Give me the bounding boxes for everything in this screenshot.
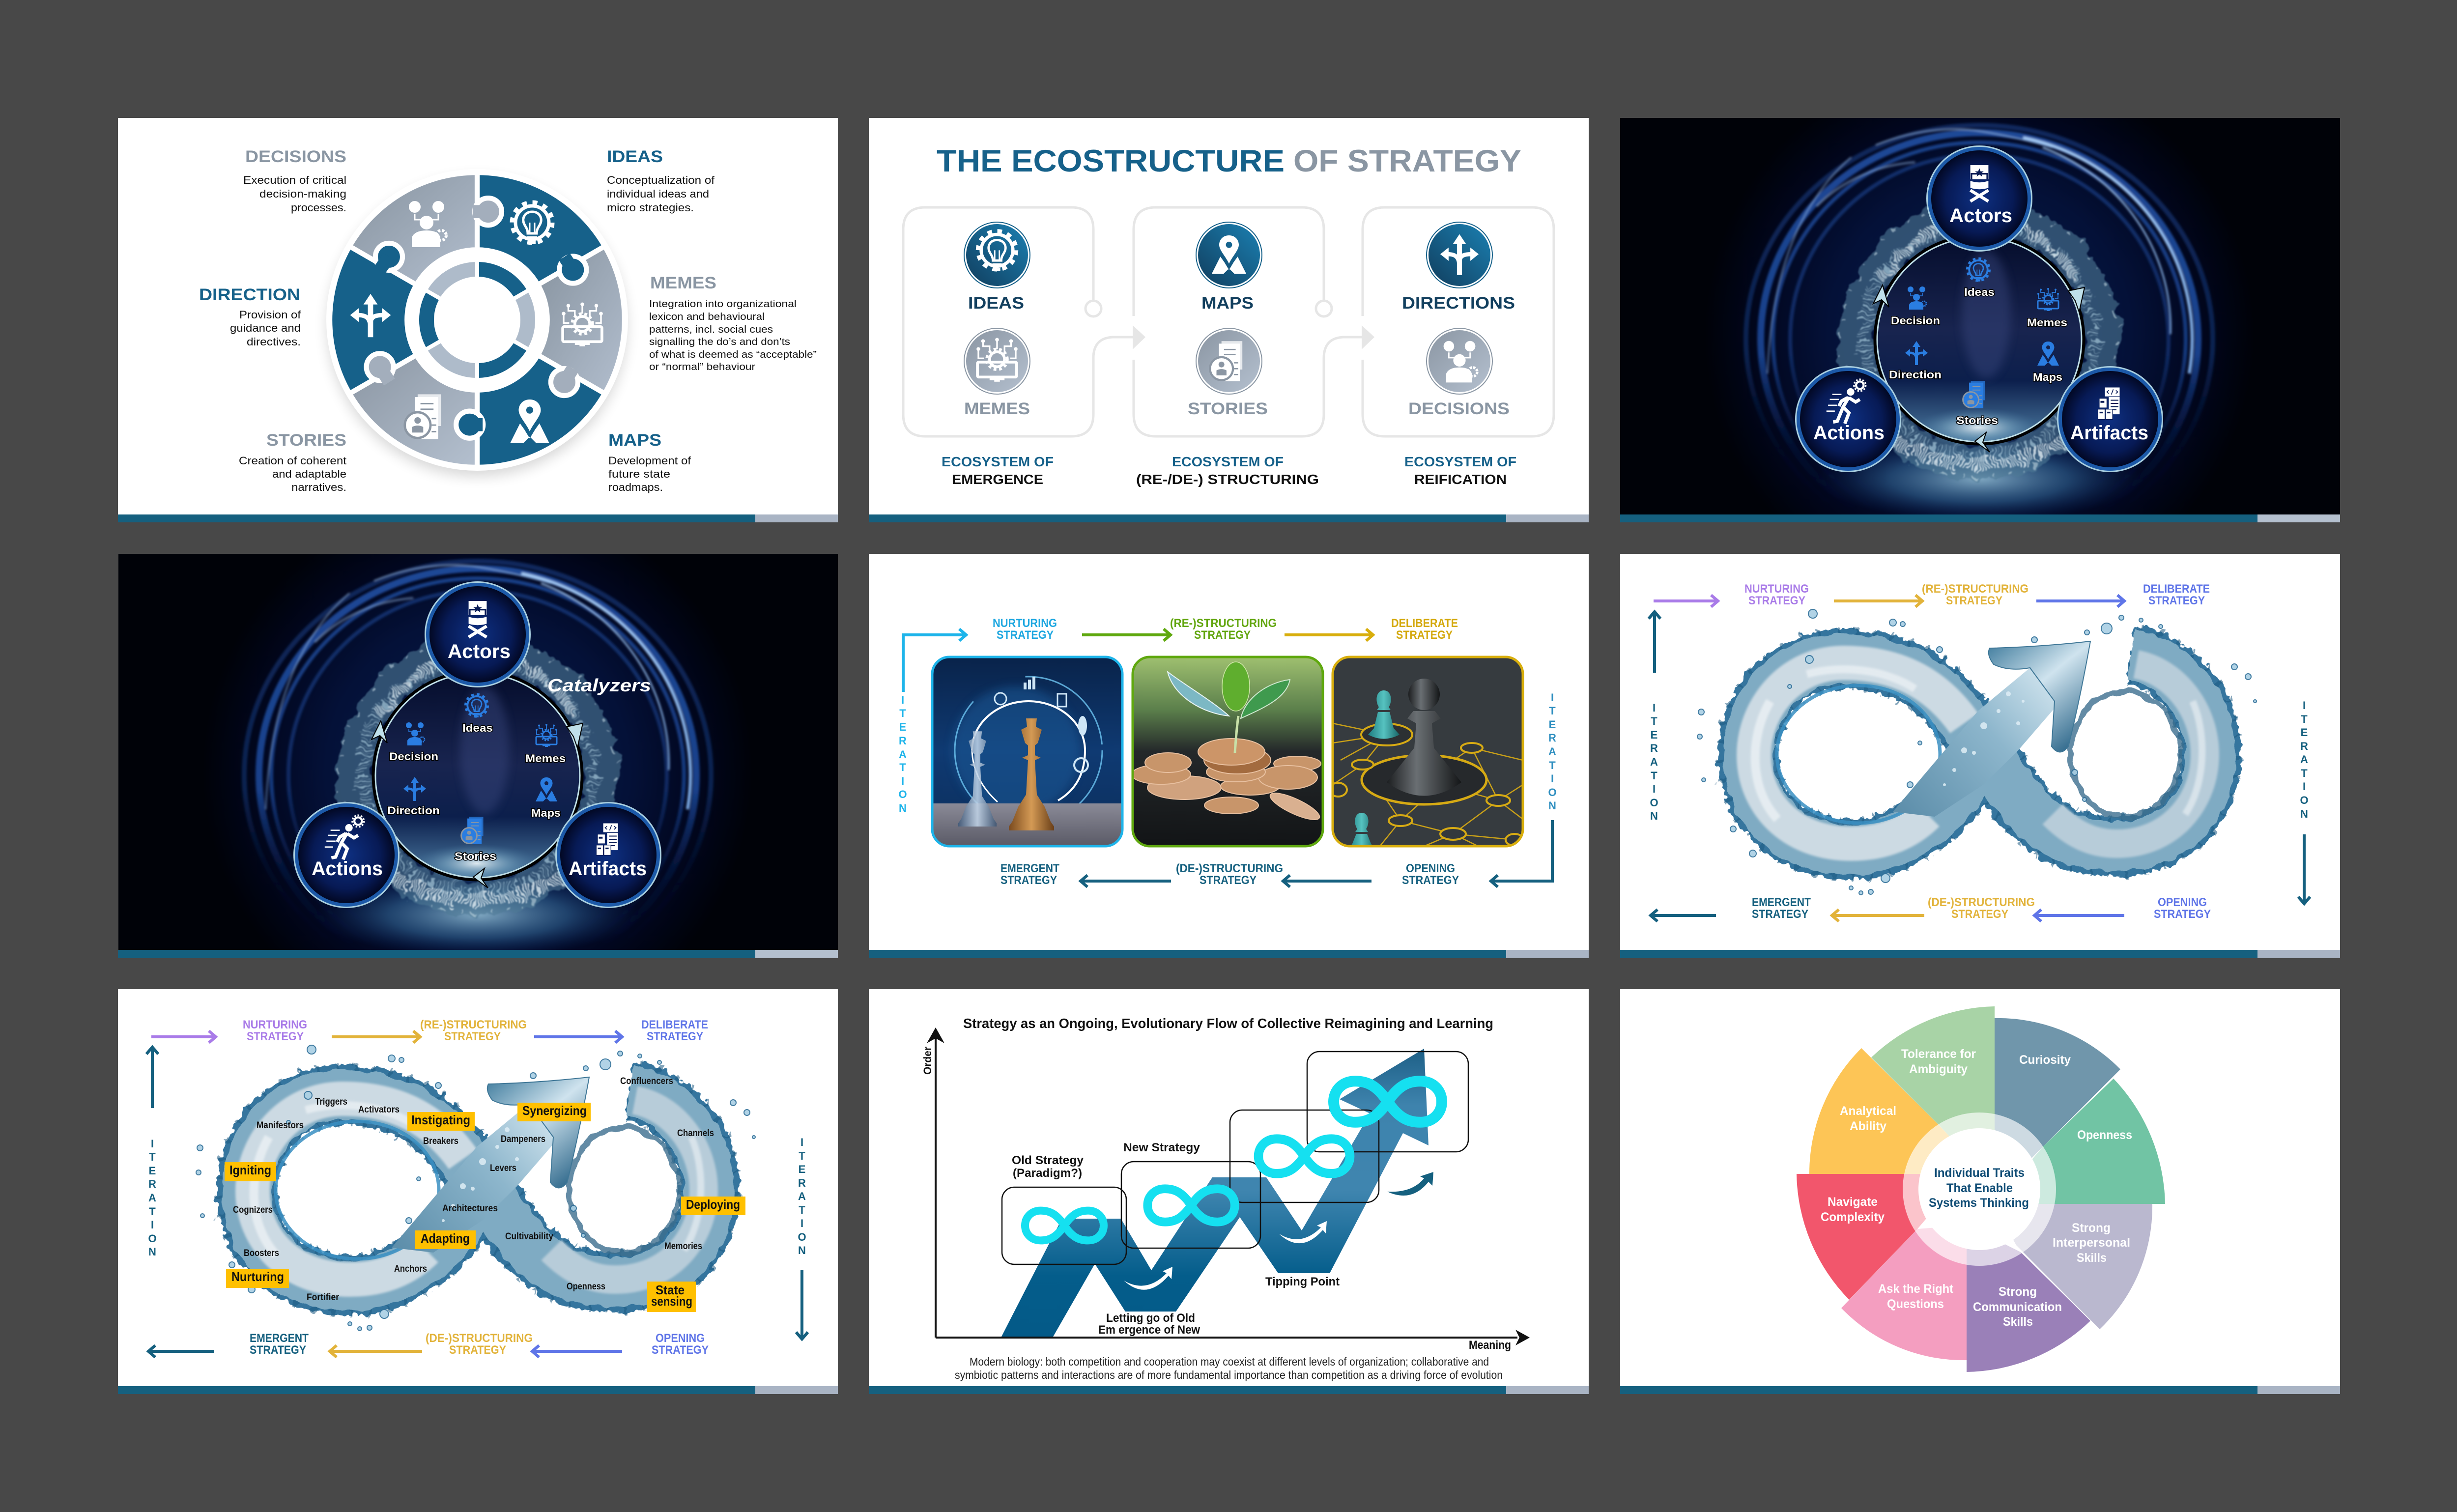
axes: Order	[921, 1047, 934, 1075]
inner items: Memes	[2027, 316, 2067, 329]
segment labels: Tolerance for	[1901, 1047, 1976, 1061]
yellow process labels: Igniting	[229, 1163, 271, 1177]
column: maps and stories: STORIES	[1188, 399, 1268, 418]
axes	[921, 1027, 1530, 1352]
black mechanism labels: Openness	[567, 1282, 605, 1292]
iteration right: N	[1548, 799, 1556, 812]
segment labels: Ambiguity	[1909, 1062, 1968, 1076]
footer bar	[118, 950, 838, 958]
text block: stories: and adaptable	[272, 468, 346, 480]
chart annotations: New Strategy	[1123, 1141, 1200, 1154]
iteration left with up arrow: O	[148, 1232, 157, 1245]
iteration right with down arrow: I	[800, 1217, 803, 1229]
image: plant growing from coins	[1132, 657, 1323, 846]
black mechanism labels: Fortifier	[307, 1292, 340, 1303]
yellow process labels: sensing	[651, 1294, 692, 1309]
black mechanism labels: Breakers	[423, 1136, 458, 1146]
iteration left: N	[899, 802, 907, 814]
node: actions	[293, 802, 400, 908]
column: directions and decisions: DECISIONS	[1408, 399, 1510, 418]
text block: maps: roadmaps.	[608, 481, 663, 493]
bottom strategy labels: (DE-)STRUCTURING	[426, 1332, 533, 1345]
bottom strategy labels: STRATEGY	[1951, 908, 2008, 921]
iteration right with down arrow: T	[2301, 767, 2308, 779]
column: ideas and memes: MEMES	[964, 399, 1030, 418]
text block: maps: future state	[608, 468, 670, 480]
text block: ideas: individual ideas and	[607, 188, 709, 200]
footer bar	[869, 1386, 1589, 1394]
black mechanism labels: Cultivability	[505, 1231, 553, 1242]
text block: decisions: DECISIONS	[245, 147, 346, 166]
iteration right: I	[1551, 691, 1554, 704]
node: artifacts: Artifacts	[569, 858, 647, 880]
text block: stories: STORIES	[266, 431, 346, 450]
footer bar	[1620, 950, 2340, 958]
iteration left with up arrow: A	[148, 1192, 156, 1204]
segment labels: Complexity	[1821, 1210, 1885, 1224]
iteration left with up arrow: N	[1650, 810, 1658, 822]
top arrows	[1654, 595, 2124, 607]
iteration left with up arrow: N	[148, 1246, 156, 1258]
image: chess king with digital icons	[932, 657, 1122, 846]
black mechanism labels: Levers	[490, 1163, 516, 1173]
footer bar	[869, 950, 1589, 958]
text block: decisions	[243, 147, 346, 214]
inner items: Direction	[387, 804, 440, 817]
text block: memes: signalling the do’s and don’ts	[649, 337, 790, 347]
text block: memes: patterns, incl. social cues	[649, 324, 773, 335]
axes: Meaning	[1469, 1339, 1511, 1352]
iteration left with up arrow: T	[1651, 770, 1657, 782]
iteration left with up arrow: R	[1650, 742, 1658, 754]
iteration right with down arrow: I	[2303, 780, 2306, 793]
column: ideas and memes	[964, 222, 1030, 418]
text block: decisions: decision-making	[259, 188, 346, 200]
footnote: Modern biology: both competition and cooperation may coexist at different levels of organization; collaborative and	[970, 1355, 1489, 1368]
panel: strategy cycle with three images	[869, 554, 1589, 958]
black mechanism labels: Activators	[358, 1105, 400, 1115]
top arrows	[903, 629, 1373, 692]
bottom strategy labels: OPENING	[1406, 862, 1455, 875]
node: actors: Actors	[1949, 205, 2012, 227]
footer bar	[1620, 1386, 2340, 1394]
footnote: symbiotic patterns and interactions are of more fundamental importance than competition as a driving force of evolution	[955, 1369, 1503, 1381]
iteration left with up arrow: T	[149, 1151, 156, 1163]
segment labels: Strong	[2072, 1221, 2111, 1235]
iteration right with down arrow: I	[800, 1136, 803, 1148]
ecosystem captions: REIFICATION	[1414, 472, 1507, 487]
iteration right with down arrow	[796, 1136, 808, 1339]
segment labels: Ability	[1850, 1119, 1886, 1133]
text block: maps: MAPS	[608, 431, 661, 450]
iteration right with down arrow: T	[799, 1204, 805, 1216]
inner items: Ideas	[462, 722, 493, 734]
text block: direction: guidance and	[230, 322, 301, 334]
bottom arrows	[1081, 820, 1552, 887]
iteration right with down arrow	[2298, 699, 2310, 904]
bottom strategy labels: EMERGENT	[250, 1332, 309, 1345]
top strategy labels	[993, 617, 1458, 642]
infinity symbols	[1025, 1081, 1442, 1240]
iteration left: I	[901, 775, 904, 787]
top strategy labels: STRATEGY	[2148, 594, 2205, 607]
bottom strategy labels	[1000, 862, 1459, 887]
iteration left: T	[899, 707, 906, 719]
iteration left: R	[899, 735, 907, 747]
black mechanism labels: Dampeners	[501, 1134, 545, 1144]
inner items	[387, 694, 566, 862]
yellow process labels: Synergizing	[522, 1103, 587, 1118]
text block: memes: Integration into organizational	[649, 299, 797, 310]
chart annotations: Em ergence of New	[1098, 1323, 1200, 1337]
yellow process labels	[225, 1103, 745, 1312]
text block: memes: or “normal” behaviour	[649, 362, 755, 372]
chart annotations: (Paradigm?)	[1013, 1167, 1082, 1180]
iteration right with down arrow: E	[799, 1163, 805, 1175]
node: actions	[1795, 366, 1901, 472]
text block: direction	[199, 285, 301, 348]
panel: puzzle wheel of decisions, ideas, memes, maps, stories, direction	[118, 118, 838, 522]
iteration right: A	[1548, 745, 1556, 758]
iteration left with up arrow: I	[151, 1219, 154, 1231]
catalyzers label: Catalyzers	[547, 675, 651, 695]
text block: maps: Development of	[608, 455, 691, 467]
top arrows	[151, 1031, 622, 1043]
panel: water infinity with process labels	[118, 989, 838, 1394]
bottom arrows	[148, 1345, 622, 1357]
bottom strategy labels: STRATEGY	[1200, 874, 1257, 887]
top strategy labels: STRATEGY	[1396, 628, 1453, 642]
bottom strategy labels: STRATEGY	[1752, 908, 1808, 921]
iteration right with down arrow: O	[798, 1231, 806, 1243]
iteration left: O	[898, 788, 907, 800]
black mechanism labels	[233, 1076, 714, 1303]
iteration left with up arrow: I	[151, 1138, 154, 1150]
column: ideas and memes: IDEAS	[968, 294, 1024, 313]
iteration right: O	[1548, 786, 1557, 799]
inner items: Decision	[1891, 314, 1940, 327]
text block: memes: of what is deemed as “acceptable”	[649, 349, 817, 360]
inner items: Memes	[525, 752, 566, 765]
inner items: Stories	[455, 850, 496, 862]
top strategy labels: STRATEGY	[647, 1030, 703, 1043]
top strategy labels: STRATEGY	[1748, 594, 1805, 607]
text block: stories	[239, 431, 346, 493]
top strategy labels: (RE-)STRUCTURING	[1170, 617, 1277, 630]
column: maps and stories	[1188, 222, 1268, 418]
iteration right with down arrow: R	[798, 1177, 806, 1189]
iteration left with up arrow: I	[1653, 783, 1656, 795]
iteration right: T	[1549, 759, 1556, 771]
chart annotations	[1012, 1141, 1340, 1337]
node: actors: Actors	[448, 641, 511, 662]
water infinity arrow	[196, 1045, 755, 1331]
black mechanism labels: Confluencers	[620, 1076, 673, 1086]
black mechanism labels: Triggers	[315, 1097, 347, 1107]
iteration left with up arrow: I	[1653, 702, 1656, 714]
top strategy labels: STRATEGY	[997, 628, 1054, 642]
iteration right: R	[1548, 732, 1556, 744]
bottom strategy labels	[1752, 896, 2211, 921]
text block: direction: Provision of	[239, 309, 301, 321]
panel: actors actions artifacts water vortex	[1620, 118, 2340, 522]
pinwheel segments	[1797, 1006, 2165, 1372]
top strategy labels: (RE-)STRUCTURING	[1922, 582, 2028, 596]
black mechanism labels: Anchors	[394, 1264, 427, 1274]
segment labels: Questions	[1887, 1297, 1944, 1311]
ecosystem captions: EMERGENCE	[952, 472, 1043, 487]
bottom strategy labels	[250, 1332, 709, 1357]
text block: stories: Creation of coherent	[239, 455, 346, 467]
ecosystem captions	[942, 454, 1516, 487]
segment labels: Curiosity	[2019, 1053, 2071, 1067]
segment labels: Ask the Right	[1878, 1282, 1954, 1296]
text block: ideas	[607, 147, 715, 214]
yellow process labels: State	[656, 1283, 685, 1297]
ecosystem captions: (RE-/DE-) STRUCTURING	[1136, 472, 1319, 487]
bottom strategy labels: (DE-)STRUCTURING	[1928, 896, 2035, 909]
title: THE ECOSTRUCTURE	[937, 144, 1285, 178]
top strategy labels: STRATEGY	[1194, 628, 1251, 642]
inner items: Decision	[389, 750, 438, 763]
text block: ideas: IDEAS	[607, 147, 663, 166]
iteration left with up arrow: O	[1650, 797, 1658, 809]
strategy boxes	[1002, 1052, 1468, 1264]
node: artifacts: Artifacts	[2070, 422, 2148, 444]
top strategy labels	[1744, 582, 2210, 607]
node: actors	[1926, 145, 2032, 252]
panel: individual traits pinwheel	[1620, 989, 2340, 1394]
center label: Individual Traits	[1934, 1166, 2025, 1180]
iteration right with down arrow: R	[2300, 740, 2308, 752]
bottom strategy labels: STRATEGY	[449, 1343, 506, 1357]
chart title: Strategy as an Ongoing, Evolutionary Flow of Collective Reimagining and Learning	[963, 1016, 1493, 1031]
iteration left: I	[901, 694, 904, 706]
top strategy labels: STRATEGY	[1946, 594, 2002, 607]
inner items	[1889, 258, 2067, 427]
title: OF STRATEGY	[1293, 144, 1521, 178]
iteration left with up arrow: R	[148, 1178, 156, 1190]
iteration right with down arrow: N	[2300, 808, 2308, 820]
text block: direction: DIRECTION	[199, 285, 300, 304]
iteration right with down arrow: T	[2301, 713, 2308, 725]
text block: direction: directives.	[247, 336, 301, 348]
iteration right: E	[1549, 718, 1556, 731]
node: artifacts	[2057, 366, 2163, 472]
yellow process labels: Deploying	[686, 1197, 740, 1212]
zigzag arrow ribbon	[1001, 1049, 1428, 1338]
iteration left: A	[899, 748, 907, 761]
text block: maps	[608, 431, 691, 493]
small curved arrows	[1124, 1172, 1433, 1290]
chart annotations: Letting go of Old	[1106, 1312, 1195, 1325]
bottom strategy labels: EMERGENT	[1752, 896, 1811, 909]
segment labels: Interpersonal	[2053, 1236, 2130, 1250]
iteration right: T	[1549, 705, 1556, 717]
inner items: Maps	[531, 807, 561, 819]
panel: water infinity with strategy cycle	[1620, 554, 2340, 958]
chart annotations: Tipping Point	[1265, 1275, 1340, 1288]
panel: strategy as evolutionary flow chart	[869, 989, 1589, 1394]
iteration right with down arrow: I	[2303, 699, 2306, 712]
ecosystem captions: ECOSYSTEM OF	[942, 454, 1054, 469]
top strategy labels: STRATEGY	[247, 1030, 304, 1043]
iteration right with down arrow: A	[798, 1190, 806, 1202]
title	[937, 144, 1521, 178]
center label: Systems Thinking	[1929, 1196, 2029, 1210]
iteration right with down arrow: O	[2300, 794, 2309, 806]
iteration right with down arrow: E	[2301, 726, 2308, 739]
segment labels: Strong	[1999, 1285, 2037, 1299]
segment labels: Navigate	[1828, 1195, 1878, 1209]
yellow process labels: Adapting	[421, 1231, 470, 1246]
bottom strategy labels: STRATEGY	[2154, 908, 2211, 921]
yellow process labels: Nurturing	[231, 1269, 284, 1284]
panel: the ecostructure of strategy	[869, 118, 1589, 522]
panel: catalyzers water vortex	[118, 554, 838, 958]
black mechanism labels: Cognizers	[233, 1205, 273, 1215]
iteration left: T	[899, 761, 906, 773]
footer bar	[118, 514, 838, 522]
image: chess pawns on network	[1329, 657, 1523, 849]
top strategy labels: DELIBERATE	[1391, 617, 1458, 630]
bottom strategy labels: (DE-)STRUCTURING	[1176, 862, 1283, 875]
water infinity arrow	[1697, 609, 2257, 895]
top strategy labels: NURTURING	[1744, 582, 1809, 596]
segment labels: Skills	[2077, 1251, 2107, 1265]
bottom strategy labels: STRATEGY	[1000, 874, 1057, 887]
node: artifacts	[555, 802, 661, 908]
iteration right with down arrow: A	[2300, 753, 2308, 766]
bottom strategy labels: STRATEGY	[652, 1343, 709, 1357]
text block: memes: MEMES	[650, 274, 716, 292]
bottom strategy labels: EMERGENT	[1000, 862, 1059, 875]
iteration left with up arrow	[1649, 612, 1660, 822]
black mechanism labels: Memories	[664, 1241, 702, 1252]
bottom strategy labels: STRATEGY	[250, 1343, 306, 1357]
node: actions: Actions	[1813, 422, 1885, 444]
inner items: Maps	[2033, 371, 2062, 383]
black mechanism labels: Boosters	[244, 1248, 279, 1258]
iteration left with up arrow: E	[149, 1165, 156, 1177]
ecosystem captions: ECOSYSTEM OF	[1172, 454, 1284, 469]
bottom strategy labels: OPENING	[2158, 896, 2207, 909]
center label: That Enable	[1946, 1181, 2013, 1195]
segment labels	[1821, 1047, 2132, 1329]
iteration left with up arrow: T	[149, 1205, 156, 1218]
top strategy labels: (RE-)STRUCTURING	[420, 1018, 527, 1031]
center label	[1929, 1166, 2029, 1210]
bottom arrows	[1651, 910, 2124, 921]
iteration left: E	[899, 721, 906, 733]
footnote	[955, 1355, 1503, 1381]
bottom strategy labels: STRATEGY	[1402, 874, 1459, 887]
black mechanism labels: Architectures	[442, 1203, 498, 1214]
column: directions and decisions	[1402, 222, 1515, 418]
column: maps and stories: MAPS	[1201, 294, 1254, 313]
segment labels: Skills	[2003, 1315, 2033, 1329]
segment labels: Communication	[1973, 1300, 2062, 1314]
node: actors	[425, 581, 531, 687]
chart annotations: Old Strategy	[1012, 1154, 1084, 1167]
inner items: Direction	[1889, 369, 1942, 381]
text block: ideas: micro strategies.	[607, 201, 694, 214]
segment labels: Analytical	[1840, 1104, 1896, 1118]
footer bar	[118, 1386, 838, 1394]
inner items: Ideas	[1964, 286, 1995, 298]
top strategy labels: STRATEGY	[444, 1030, 501, 1043]
iteration left with up arrow: T	[1651, 715, 1657, 727]
node: actions: Actions	[312, 858, 383, 880]
text block: memes: lexicon and behavioural	[649, 312, 765, 322]
column: directions and decisions: DIRECTIONS	[1402, 294, 1515, 313]
iteration right with down arrow: N	[798, 1244, 806, 1256]
ecosystem captions: ECOSYSTEM OF	[1404, 454, 1516, 469]
iteration right with down arrow: T	[799, 1150, 805, 1162]
black mechanism labels: Channels	[677, 1128, 714, 1139]
text block: decisions: Execution of critical	[243, 174, 346, 186]
inner items: Stories	[1956, 414, 1998, 427]
top strategy labels	[243, 1018, 708, 1043]
text block: stories: narratives.	[291, 481, 346, 493]
yellow process labels: Instigating	[411, 1113, 470, 1127]
footer bar	[869, 514, 1589, 522]
black mechanism labels: Manifestors	[257, 1120, 304, 1131]
iteration right: I	[1551, 772, 1554, 785]
text block: decisions: processes.	[291, 201, 346, 214]
text block: ideas: Conceptualization of	[607, 174, 715, 186]
connector boxes and arrows	[903, 207, 1554, 436]
top strategy labels: NURTURING	[243, 1018, 307, 1031]
iteration left with up arrow	[146, 1047, 158, 1258]
top strategy labels: DELIBERATE	[2143, 582, 2210, 596]
iteration left with up arrow: A	[1650, 756, 1658, 768]
top strategy labels: DELIBERATE	[641, 1018, 708, 1031]
segment labels: Openness	[2077, 1128, 2132, 1142]
bottom strategy labels: OPENING	[656, 1332, 705, 1345]
iteration left with up arrow: E	[1651, 729, 1657, 741]
footer bar	[1620, 514, 2340, 522]
text block: memes	[649, 274, 817, 372]
top strategy labels: NURTURING	[993, 617, 1057, 630]
puzzle wheel	[326, 169, 628, 476]
